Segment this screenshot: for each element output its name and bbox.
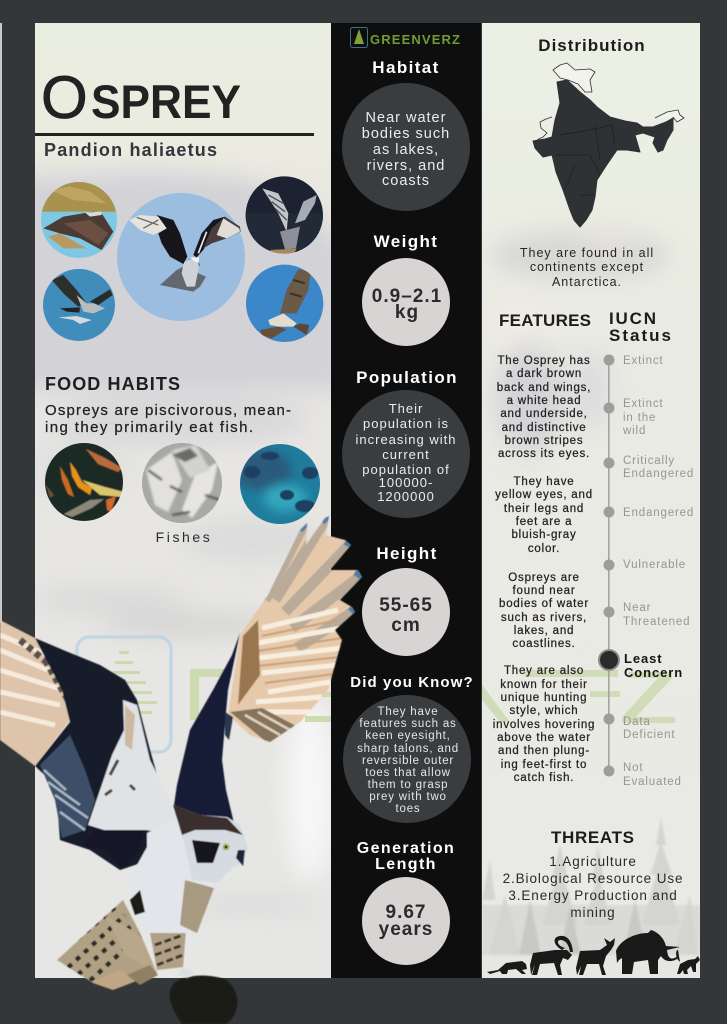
chart: IUCN status scale: Vulnerable	[623, 559, 686, 571]
bubble: did you know: reversible outer	[362, 755, 454, 767]
caption: fishes: Fishes	[156, 529, 212, 545]
chart: IUCN status scale: Extinct	[623, 398, 663, 410]
bubble: did you know: They have	[378, 706, 438, 718]
panel: right background	[482, 23, 700, 978]
text: features: bodies of water	[499, 598, 589, 610]
text: features: a dark brown	[506, 368, 582, 380]
text: features: and distinctive	[502, 422, 586, 434]
logo: greenverz: GREENVERZ	[370, 32, 460, 47]
icon: animal silhouettes	[487, 930, 700, 975]
text: features: yellow eyes, and	[495, 489, 593, 501]
text: features	[493, 355, 595, 784]
food habits text: Ospreys are piscivorous, mean-	[45, 402, 291, 419]
chart: IUCN status scale: Deficient	[623, 729, 675, 741]
chart: IUCN status scale: Least	[624, 651, 662, 666]
text: features: feet are a	[516, 516, 572, 528]
text: features: their legs and	[504, 503, 584, 515]
bubble: habitat: as lakes,	[373, 142, 439, 158]
text: features: known for their	[500, 679, 588, 691]
illustration: large osprey	[0, 510, 370, 1024]
text: features: such as rivers,	[501, 612, 587, 624]
chart: IUCN status scale: Near	[623, 602, 651, 614]
heading: generation length: Generation	[357, 840, 455, 857]
text: distribution note: Antarctica.	[552, 275, 622, 289]
bubble: population: population is	[363, 416, 449, 431]
text: features: found near	[512, 585, 576, 597]
heading: population: Population	[356, 368, 458, 387]
text: features: They are also	[504, 665, 584, 677]
bubble: habitat: rivers, and	[367, 158, 445, 174]
text: distribution note	[520, 246, 654, 289]
photo: osprey in flight main	[117, 193, 245, 321]
bubble: habitat	[342, 83, 470, 211]
heading: IUCN status: Status	[609, 326, 672, 345]
bubble: did you know: prey with two	[369, 791, 447, 803]
heading: generation length: Length	[375, 856, 437, 873]
photo: pile of fish	[142, 443, 222, 523]
food habits text	[45, 402, 291, 436]
text: features: and underside,	[500, 408, 588, 420]
bubble: did you know: them to grasp	[368, 779, 448, 791]
bubble: height: cm	[391, 615, 421, 636]
text: features: catch fish.	[514, 772, 574, 784]
bubble: habitat: bodies such	[362, 126, 450, 142]
heading: food habits: FOOD HABITS	[45, 374, 180, 394]
bubble: did you know: features such as	[359, 718, 457, 730]
text: features: The Osprey has	[497, 355, 591, 367]
heading: height: Height	[376, 544, 438, 563]
food habits text: ing they primarily eat fish.	[45, 419, 253, 436]
bubble: population: population of	[362, 462, 450, 477]
watermark: logo and wordmark	[77, 637, 675, 752]
chart: IUCN status scale: Threatened	[623, 616, 690, 628]
heading: IUCN status: IUCN	[609, 309, 657, 328]
chart: IUCN status scale: Data	[623, 716, 651, 728]
illustration: misty forest	[482, 821, 700, 956]
chart: IUCN status scale	[598, 354, 694, 788]
bubble: generation length: 9.67	[386, 902, 426, 923]
chart: IUCN status scale: Critically	[623, 455, 675, 467]
bubble: population: 1200000	[377, 489, 435, 504]
head	[173, 805, 248, 883]
heading: did you know: Did you Know?	[350, 674, 474, 691]
bubble: population: increasing with	[356, 432, 456, 447]
right wing dark arm	[174, 633, 240, 840]
text: features: They have	[514, 476, 574, 488]
bubble: habitat: Near water	[366, 110, 446, 126]
photo: koi fish	[45, 443, 123, 521]
heading: distribution: Distribution	[538, 36, 646, 55]
bubble: population: Their	[389, 401, 423, 416]
text: features: bluish-gray	[511, 529, 577, 541]
chart: IUCN status scale: Evaluated	[623, 776, 682, 788]
text: features: ing feet-first to	[501, 759, 587, 771]
fish held in talons	[170, 976, 238, 1024]
photo: osprey on dark water	[243, 175, 327, 255]
bubble: population	[342, 390, 470, 518]
secondary feather stripes	[40, 735, 95, 838]
panel: middle black column	[331, 23, 481, 978]
bubble: generation length	[362, 877, 450, 965]
title	[41, 64, 241, 131]
text: features: Ospreys are	[508, 572, 580, 584]
bubble: did you know: toes that allow	[365, 767, 451, 779]
bubble: weight: 0.9–2.1	[372, 286, 442, 307]
bubble: did you know: sharp talons, and	[357, 743, 459, 755]
text: features: above the water	[497, 732, 591, 744]
chart: IUCN status scale: Endangered	[623, 507, 694, 519]
text: features: unique hunting	[501, 692, 587, 704]
wing white coverts	[88, 700, 180, 835]
text: threats list: mining	[570, 905, 616, 920]
heading: habitat: Habitat	[372, 58, 440, 77]
photo: reef fish	[240, 444, 320, 524]
tail	[56, 900, 158, 990]
title rule	[35, 133, 314, 136]
heading: weight: Weight	[374, 232, 438, 251]
text: threats list: 1.Agriculture	[549, 854, 637, 869]
text: threats list: 2.Biological Resource Use	[503, 871, 683, 886]
photo: osprey on nest	[41, 182, 117, 258]
left wing tan	[0, 620, 70, 767]
text: features: coastlines.	[512, 638, 576, 650]
bubble: height	[362, 568, 450, 656]
title: SPREY	[91, 75, 241, 128]
logo: greenverz	[350, 28, 460, 48]
heading: IUCN status	[609, 309, 672, 345]
bubble: did you know	[343, 695, 471, 823]
panel: left background	[35, 23, 331, 978]
chart: IUCN status scale: Concern	[624, 665, 683, 680]
chart: IUCN status scale: Not	[623, 762, 643, 774]
text: features: brown stripes	[505, 435, 583, 447]
heading: generation length	[357, 840, 455, 873]
text: features: a white head	[507, 395, 581, 407]
text: features: style, which	[509, 705, 579, 717]
chart: IUCN status scale: Extinct	[623, 355, 663, 367]
text: features: lakes, and	[514, 625, 574, 637]
text: features: color.	[528, 543, 560, 555]
heading: threats: THREATS	[551, 828, 635, 847]
bubble: population: current	[382, 447, 430, 462]
bubble: population: 100000-	[379, 475, 433, 490]
chart: IUCN status scale: wild	[622, 425, 646, 437]
bubble: habitat: coasts	[382, 173, 430, 189]
text: features: back and wings,	[497, 382, 591, 394]
chart: IUCN status scale: Endangered	[623, 468, 694, 480]
bubble: did you know: toes	[396, 803, 420, 815]
text: distribution note: They are found in all	[520, 246, 654, 260]
bubble: generation length: years	[379, 919, 433, 940]
text: features: and then plung-	[498, 745, 590, 757]
left wing dark underside	[35, 638, 172, 870]
chart: IUCN status scale: in the	[623, 412, 656, 424]
text: features: involves hovering	[493, 719, 595, 731]
bubble: height: 55-65	[379, 595, 433, 616]
photo: osprey soaring	[243, 263, 325, 343]
bubble: weight	[362, 258, 450, 346]
heading: features: FEATURES	[499, 311, 592, 330]
text: distribution note: continents except	[530, 260, 644, 274]
right wing feathers	[227, 516, 362, 743]
title: O	[41, 64, 88, 131]
photo: osprey with fish	[42, 268, 117, 342]
bubble: weight: kg	[395, 302, 419, 323]
bubble: did you know: keen eyesight,	[365, 730, 451, 742]
subtitle: Pandion haliaetus	[44, 140, 217, 160]
map: India distribution	[533, 63, 684, 227]
body white	[127, 817, 214, 933]
text: threats list: 3.Energy Production and	[508, 888, 678, 903]
text: threats list	[503, 854, 683, 920]
text: features: across its eyes.	[498, 448, 590, 460]
leg feathers	[150, 917, 187, 970]
